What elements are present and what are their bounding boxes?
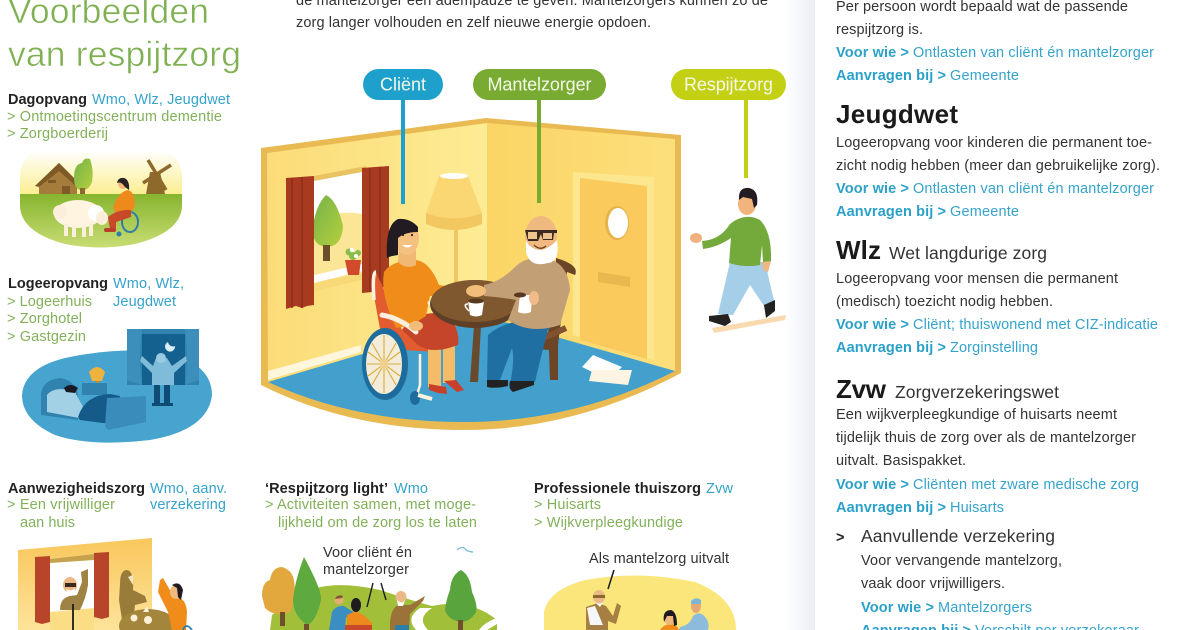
label pill: respite care bbox=[671, 69, 786, 100]
text block: professionele thuiszorg: Zvw bbox=[706, 481, 734, 497]
panel: left column examples bbox=[7, 0, 241, 443]
section: zvw: Aanvragen bij > bbox=[836, 500, 946, 516]
section: wlz: Wet langdurige zorg bbox=[889, 243, 1047, 263]
text block: respijtzorg light bbox=[265, 481, 477, 531]
loose papers bbox=[582, 355, 632, 385]
window with curtains bbox=[286, 166, 389, 309]
section: zvw: Zvw bbox=[836, 374, 887, 404]
wheelchair and client bbox=[362, 219, 465, 405]
text block: aanwezigheidszorg bbox=[7, 481, 227, 531]
label pill: client bbox=[363, 69, 443, 100]
text block: intro paragraph bbox=[296, 0, 768, 31]
illustration: room with client, caregiver and respite carer bbox=[261, 69, 786, 430]
section: wmo (continued): Voor wie > bbox=[836, 45, 909, 61]
section: wlz: Aanvragen bij > bbox=[836, 340, 946, 356]
section: wlz: Zorginstelling bbox=[950, 340, 1038, 356]
text block: aanwezigheidszorg: Aanwezigheidszorg bbox=[8, 481, 145, 497]
caption: when care fails: Als mantelzorg uitvalt bbox=[589, 551, 729, 567]
section: zvw: Een wijkverpleegkundige of huisarts neemt bbox=[836, 407, 1117, 423]
illustration: home nursing bbox=[544, 551, 736, 630]
section: jeugdwet bbox=[836, 99, 1160, 220]
text block: respijtzorg light: Wmo bbox=[394, 481, 428, 497]
text block: professionele thuiszorg: > Wijkverpleegkundige bbox=[534, 515, 683, 531]
caption: for client and caregiver bbox=[323, 545, 412, 578]
text block: logeeropvang: Wmo, Wlz, bbox=[113, 276, 184, 292]
callout line: client bbox=[401, 98, 405, 204]
text block: professionele thuiszorg: Professionele thuiszorg bbox=[534, 481, 701, 497]
panel: right column legal frameworks bbox=[836, 0, 1160, 630]
section: wmo (continued) bbox=[836, 0, 1154, 84]
text block: aanwezigheidszorg: > Een vrijwilliger bbox=[7, 497, 115, 513]
text block: logeeropvang: Jeugdwet bbox=[113, 294, 176, 310]
section: zvw: uitvalt. Basispakket. bbox=[836, 453, 966, 469]
text block: respijtzorg light: > Activiteiten samen, met moge- bbox=[265, 497, 476, 513]
illustration: volunteer at home bbox=[18, 538, 192, 630]
respite carer walking bbox=[690, 188, 786, 333]
text block: professionele thuiszorg: > Huisarts bbox=[534, 497, 601, 513]
text block: logeeropvang: > Zorghotel bbox=[7, 311, 82, 327]
text block: logeeropvang: Logeeropvang bbox=[8, 276, 108, 292]
panel: bottom examples bbox=[7, 481, 736, 630]
section: wlz: Voor wie > bbox=[836, 317, 909, 333]
title: van respijtzorg bbox=[8, 34, 241, 74]
section: zvw: tijdelijk thuis de zorg over als de mantelzorger bbox=[836, 430, 1136, 446]
section: zvw: Huisarts bbox=[950, 500, 1004, 516]
label pill: caregiver: Mantelzorger bbox=[488, 74, 592, 94]
section: jeugdwet: Aanvragen bij > bbox=[836, 204, 946, 220]
section: zvw bbox=[836, 374, 1139, 516]
text block: logeeropvang: > Gastgezin bbox=[7, 329, 86, 345]
text block: dagopvang: Wmo, Wlz, Jeugdwet bbox=[92, 92, 230, 108]
section: aanvullende verzekering: Voor vervangende mantelzorg, bbox=[861, 553, 1062, 569]
floor lamp bbox=[426, 173, 482, 285]
label pill: respite care: Respijtzorg bbox=[684, 74, 773, 94]
text block: dagopvang: > Ontmoetingscentrum dementie bbox=[7, 109, 222, 125]
text block: respijtzorg light: lijkheid om de zorg los te laten bbox=[278, 515, 477, 531]
section: wlz bbox=[836, 235, 1158, 356]
section: wmo (continued): Ontlasten van cliënt én mantelzorger bbox=[913, 45, 1154, 61]
table with cups bbox=[430, 280, 520, 382]
caregiver on chair bbox=[466, 216, 576, 392]
section: wmo (continued): respijtzorg is. bbox=[836, 22, 923, 38]
illustration: farm with sheep and wheelchair bbox=[20, 150, 182, 252]
section: jeugdwet: Logeeropvang voor kinderen die permanent toe- bbox=[836, 135, 1152, 151]
section: wlz: Cliënt; thuiswonend met CIZ-indicatie bbox=[913, 317, 1158, 333]
section: jeugdwet: Voor wie > bbox=[836, 181, 909, 197]
text block: aanwezigheidszorg: verzekering bbox=[150, 497, 226, 513]
section: wmo (continued): Gemeente bbox=[950, 68, 1019, 84]
callout line: respite bbox=[744, 98, 748, 178]
text block: dagopvang bbox=[7, 92, 230, 142]
door bbox=[573, 172, 654, 360]
section: zvw: Voor wie > bbox=[836, 477, 909, 493]
section: jeugdwet: Jeugdwet bbox=[836, 99, 958, 129]
section: zvw: Cliënten met zware medische zorg bbox=[913, 477, 1139, 493]
section: aanvullende verzekering: Mantelzorgers bbox=[938, 600, 1032, 616]
section: wlz: Wlz bbox=[836, 235, 881, 265]
section: aanvullende verzekering bbox=[836, 526, 1139, 630]
text block: logeeropvang: > Logeerhuis bbox=[7, 294, 92, 310]
section: aanvullende verzekering: Voor wie > bbox=[861, 600, 934, 616]
text block: respijtzorg light: ‘Respijtzorg light’ bbox=[265, 481, 388, 497]
section: aanvullende verzekering: Aanvullende verzekering bbox=[861, 526, 1055, 546]
callout line: caregiver bbox=[537, 98, 541, 203]
section: zvw: Zorgverzekeringswet bbox=[895, 382, 1059, 402]
label pill: caregiver bbox=[473, 69, 606, 100]
illustration: blue bedroom at night bbox=[22, 329, 212, 443]
text block: aanwezigheidszorg: Wmo, aanv. bbox=[150, 481, 227, 497]
illustration: outing in the park bbox=[262, 545, 497, 630]
text block: professionele thuiszorg bbox=[534, 481, 734, 531]
section: jeugdwet: Gemeente bbox=[950, 204, 1019, 220]
section: wmo (continued): Aanvragen bij > bbox=[836, 68, 946, 84]
text block: intro paragraph: zorg langer volhouden en zelf nieuwe energie opdoen. bbox=[296, 15, 651, 31]
room walls and floor bbox=[261, 118, 681, 430]
text block: logeeropvang bbox=[7, 276, 184, 345]
section: aanvullende verzekering: > bbox=[836, 530, 844, 546]
title bbox=[8, 0, 241, 74]
section: jeugdwet: zicht nodig hebben (meer dan gebruikelijke zorg). bbox=[836, 158, 1160, 174]
text block: dagopvang: Dagopvang bbox=[8, 92, 87, 108]
text block: aanwezigheidszorg: aan huis bbox=[20, 515, 75, 531]
section: aanvullende verzekering: vaak door vrijwilligers. bbox=[861, 576, 1005, 592]
section: wlz: Logeeropvang voor mensen die permanent bbox=[836, 271, 1118, 287]
section: wlz: (medisch) toezicht nodig hebben. bbox=[836, 294, 1053, 310]
caption: for client and caregiver: Voor cliënt én bbox=[323, 545, 412, 561]
section: jeugdwet: Ontlasten van cliënt én mantelzorger bbox=[913, 181, 1154, 197]
text block: dagopvang: > Zorgboerderij bbox=[7, 126, 108, 142]
label pill: client: Cliënt bbox=[380, 74, 426, 94]
caption: for client and caregiver: mantelzorger bbox=[323, 562, 409, 578]
